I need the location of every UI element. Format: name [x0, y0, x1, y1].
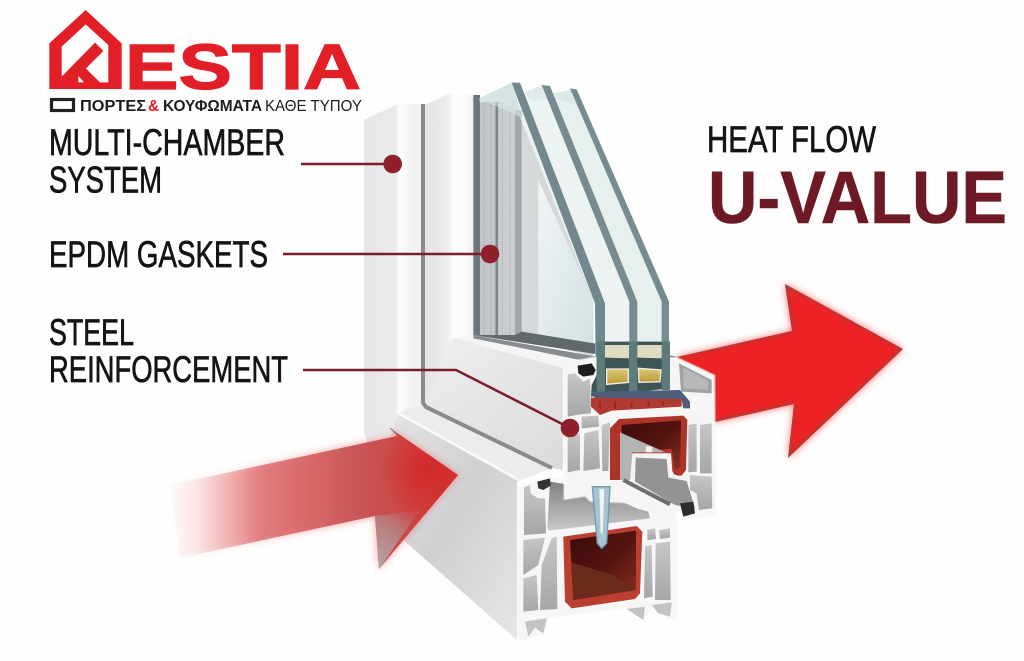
logo wordmark: ESTIA: [125, 31, 361, 103]
spacer bars: [473, 95, 480, 335]
leader: EPDM gaskets: [283, 245, 499, 263]
frame white walls: [517, 477, 677, 640]
label: multi-chamber system: SYSTEM: [49, 160, 162, 200]
frame top chamber: [524, 485, 546, 535]
frame ledge: [398, 405, 552, 480]
window frame: front faces: [364, 93, 600, 640]
sash gaskets: [578, 363, 596, 377]
cross-section: frame (lower): [517, 477, 677, 640]
heat arrow: outgoing: [660, 284, 903, 458]
logo tagline: [80, 98, 362, 115]
label: steel reinforcement: [49, 312, 288, 390]
inner window reveal: [515, 103, 593, 357]
sash channel: [630, 453, 685, 488]
logo tagline: &: [148, 98, 159, 115]
channel rail: [623, 480, 670, 504]
insulating spacers: [607, 368, 661, 384]
icon: black window frame: [52, 100, 74, 110]
drainage gasket: [592, 487, 610, 548]
logo: ESTIA: [49, 10, 362, 115]
sash sill: [425, 335, 600, 470]
pane edge: third: [570, 88, 669, 380]
frame groove: [423, 104, 552, 468]
label: multi-chamber system: [49, 122, 285, 200]
sash chambers: [568, 373, 712, 510]
label: EPDM gaskets: EPDM GASKETS: [49, 234, 268, 275]
icon: house with K: [49, 10, 122, 89]
pane ends: [597, 342, 670, 392]
bottom gasket line: [473, 332, 677, 367]
sash white walls: [564, 357, 716, 519]
label: steel reinforcement: REINFORCEMENT: [49, 349, 288, 390]
sash face: [425, 93, 563, 470]
heading: U-value: U-VALUE: [708, 156, 1007, 239]
frame feet: [525, 602, 672, 637]
heading: heat flow: HEAT FLOW: [707, 119, 876, 160]
pane edge: first: [512, 83, 605, 380]
upper-right chamber: [679, 363, 712, 393]
triple glazing: [473, 83, 677, 380]
logo tagline: ΠΟΡΤΕΣ: [80, 98, 146, 115]
outer frame face: [364, 104, 552, 640]
heat arrow: incoming: [170, 428, 458, 569]
logo tagline: ΚΟΥΦΩΜΑΤΑ: [163, 98, 262, 115]
cross-section: sash (upper): [564, 342, 716, 519]
upper steel reinforcement: [610, 416, 687, 480]
lower frame face: [380, 413, 517, 640]
glazing block: [591, 342, 670, 397]
logo tagline: ΚΑΘΕ ΤΥΠΟΥ: [265, 98, 362, 115]
label: steel reinforcement: STEEL: [49, 312, 134, 353]
pane edge: second: [542, 85, 637, 380]
leader: multi-chamber system: [301, 155, 402, 173]
label: multi-chamber system: MULTI-CHAMBER: [49, 122, 285, 163]
glazing seat: [591, 390, 690, 408]
leader: steel reinforcement: [303, 370, 579, 437]
frame channel: [547, 482, 650, 531]
frame gasket: [537, 478, 551, 490]
frame lower chambers: [523, 528, 671, 612]
lower steel reinforcement: [563, 526, 642, 608]
glass pane faces: [479, 83, 605, 357]
